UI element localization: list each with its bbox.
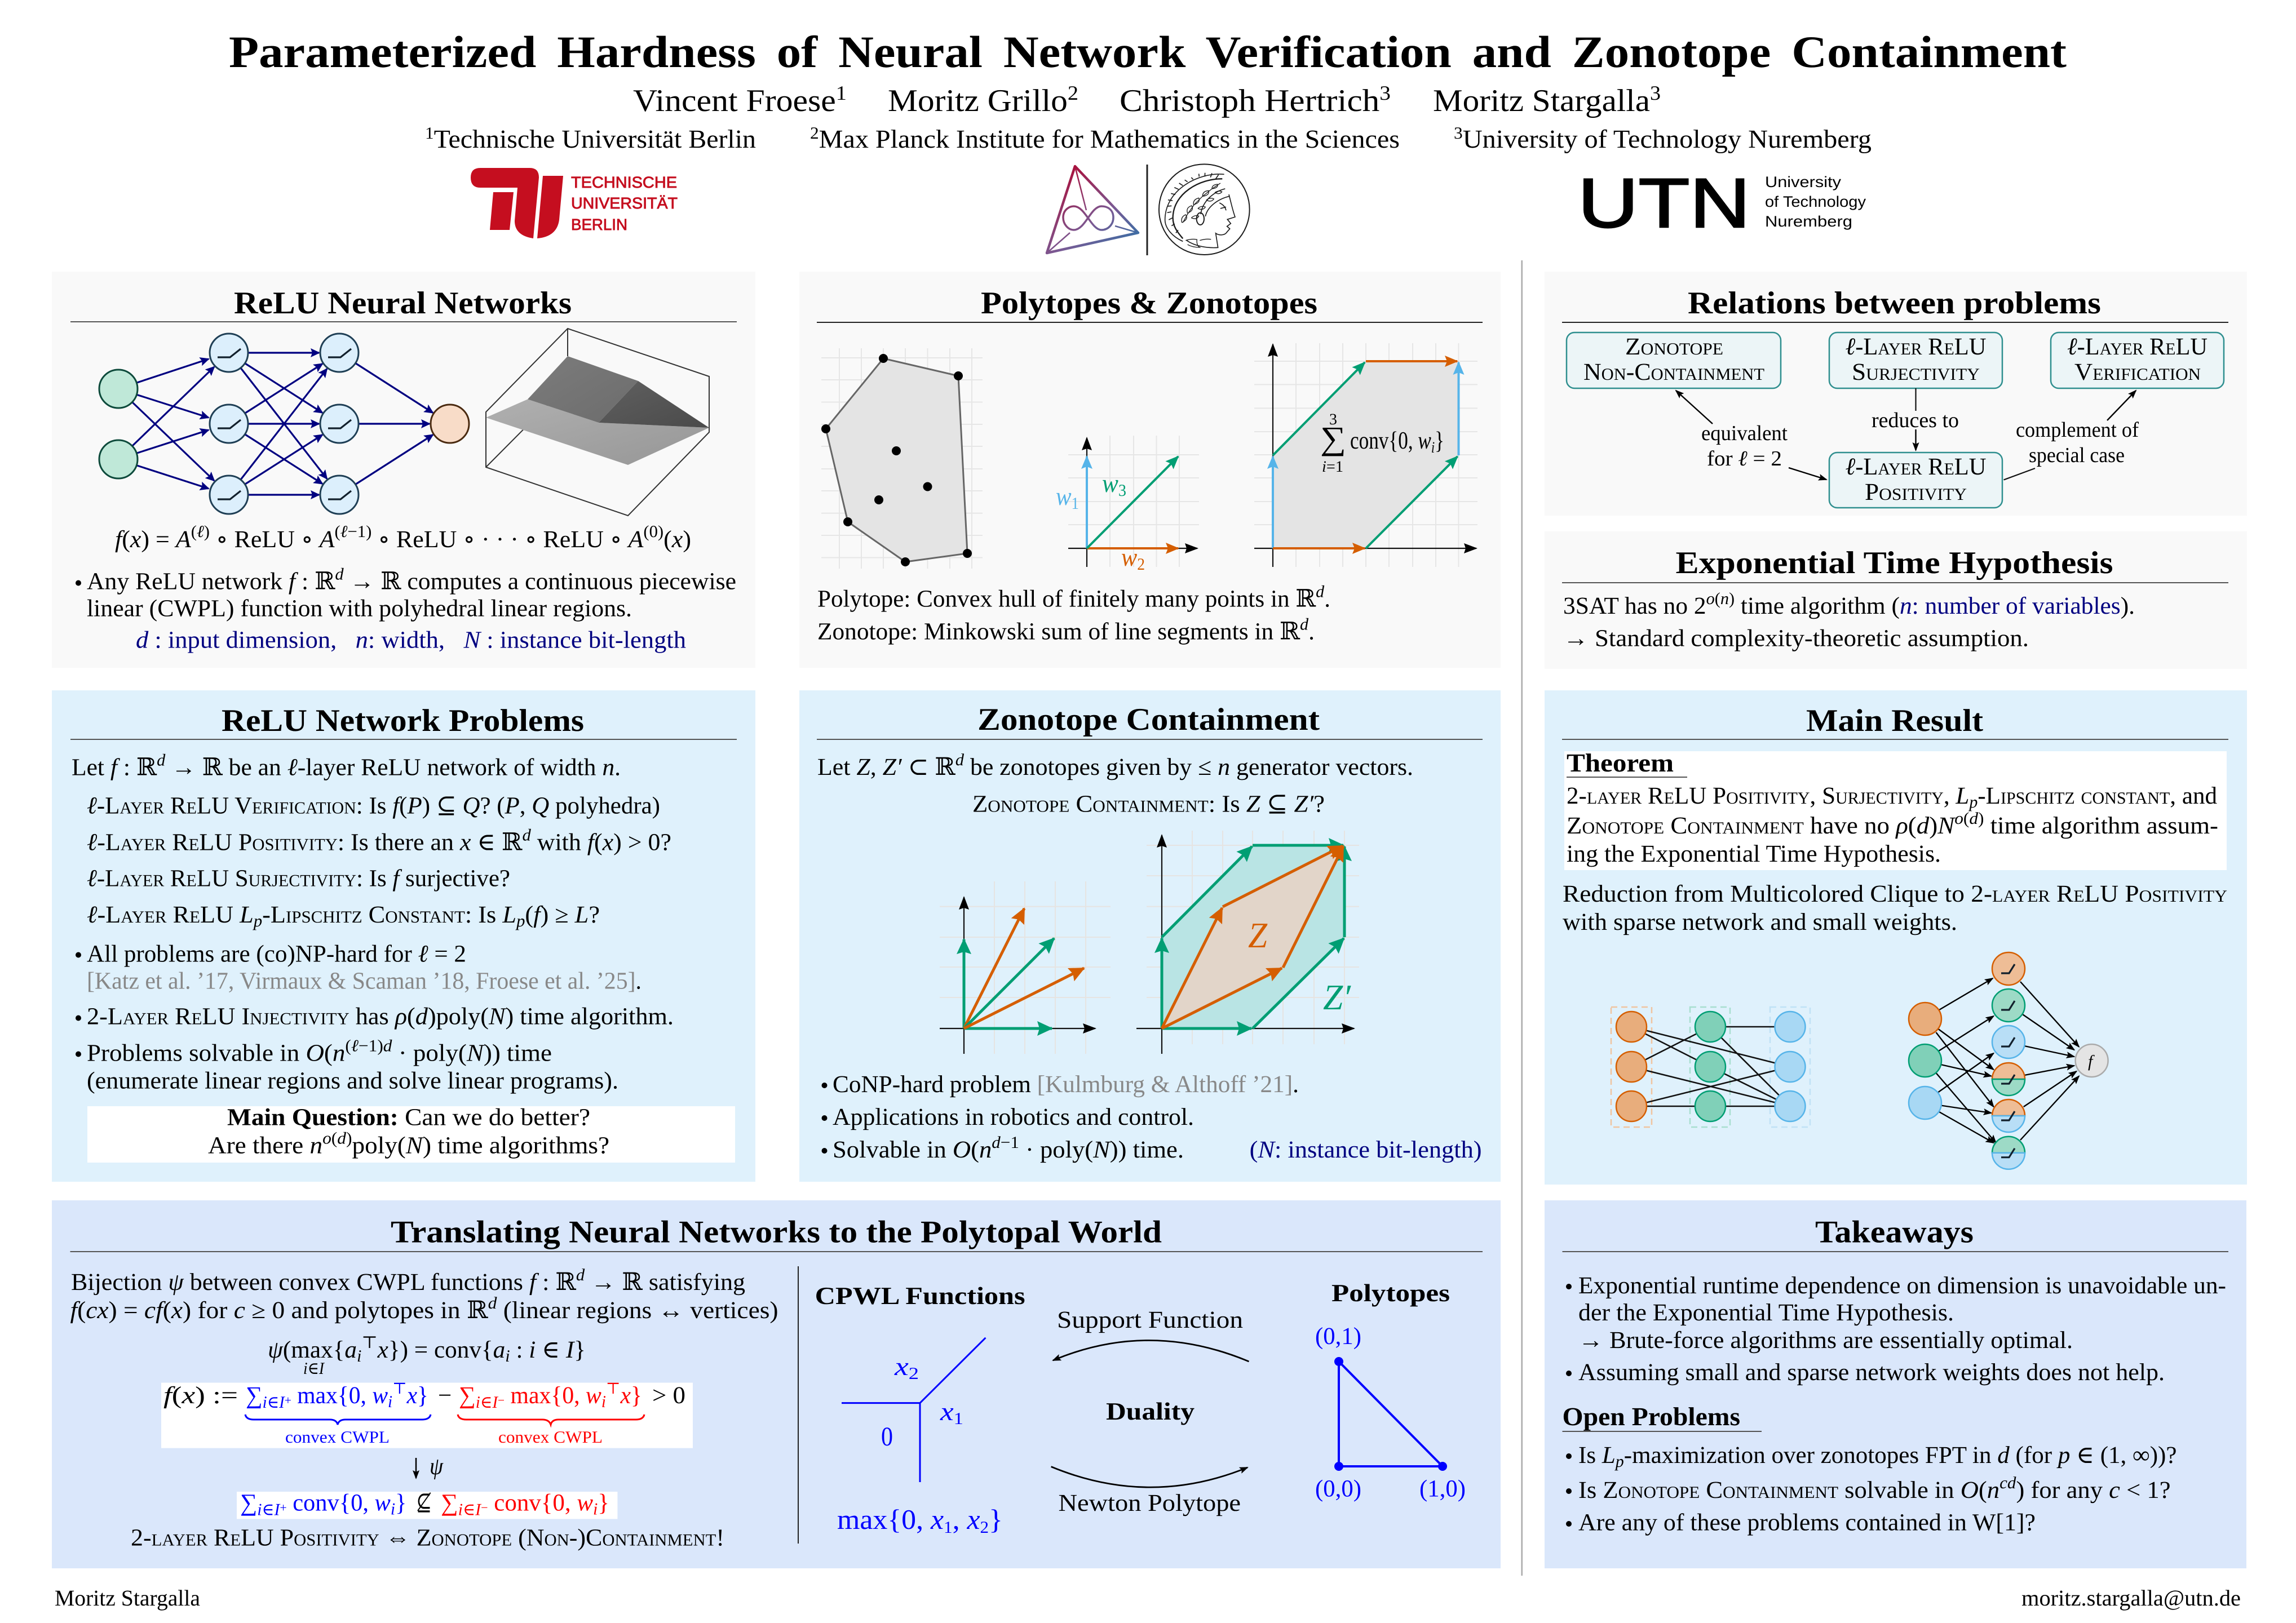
arrow: down psi (416, 1453, 444, 1480)
formula box: zonotope non-containment: I (273, 1500, 281, 1519)
arrows and labels: special case (2029, 444, 2125, 467)
definitions text: Zonotope: Minkowski sum of line segments in ℝ (817, 619, 1296, 645)
problem definitions: d (522, 826, 532, 844)
authors: Moritz Grillo (888, 83, 1057, 118)
panel: Zonotope Containment (799, 690, 1501, 1182)
problem definitions: f(x) > 0? (587, 830, 670, 855)
chart: max function graph: , (953, 1504, 967, 1535)
affiliations: University of Technology Nuremberg (1463, 125, 1872, 153)
takeaway bullets: Assuming small and sparse network weights does not help. (1578, 1359, 2165, 1386)
duality diagram: Duality (1106, 1398, 1195, 1425)
formula box: zonotope non-containment: ∑ (441, 1490, 458, 1516)
logo: UTN: of Technology (1765, 193, 1866, 210)
authors: Moritz Stargalla (1433, 83, 1638, 118)
definitions text: d (1300, 615, 1309, 633)
bullet text: d (335, 565, 344, 584)
bullet list: · poly( (392, 1040, 467, 1066)
affiliations (425, 124, 1872, 153)
formula box: f(x) difference of convex CWPL: x (406, 1382, 417, 1409)
arrow: down psi: ψ (430, 1453, 444, 1480)
callout: main question: Are there n (208, 1133, 322, 1159)
bullet list: Applications in robotics and control. (833, 1104, 1194, 1130)
authors: 2 (1068, 82, 1078, 104)
logo: UTN: Nuremberg (1765, 213, 1852, 230)
chart: Z contained in Z-prime: Z (1248, 915, 1268, 955)
affiliations: Max Planck Institute for Mathematics in the Sciences (819, 125, 1400, 153)
logo: TU Berlin: UNIVERSITÄT (571, 194, 678, 212)
formula box: f(x) difference of convex CWPL: ∑ (246, 1382, 263, 1409)
formula: x) (672, 526, 691, 553)
open problem bullets: c < 1? (2109, 1477, 2169, 1504)
formula: (ℓ) (191, 522, 210, 541)
formula box: zonotope non-containment: ∑ (240, 1490, 258, 1516)
chart: 3D surface plot (486, 329, 709, 516)
panel: Exponential Time Hypothesis (1545, 531, 2247, 669)
formula box: f(x) difference of convex CWPL: − (438, 1382, 452, 1409)
chart: constructed ReLU network: f (2088, 1052, 2095, 1071)
body text: time algorithm ( (1735, 593, 1900, 619)
formula: psi of max: i (357, 1347, 361, 1365)
chart: Z contained in Z-prime: Z′ (1323, 977, 1351, 1017)
chart: constructed ReLU network (1909, 952, 2108, 1169)
formula box: f(x) difference of convex CWPL: I (278, 1393, 286, 1412)
bullet list: d−1 (992, 1133, 1019, 1152)
callout: main question: N) time algorithms? (406, 1133, 600, 1159)
formula box: f(x) difference of convex CWPL: i (263, 1393, 267, 1412)
box: Zonotope Non-Containment (1567, 332, 1781, 388)
definitions text: d (1316, 583, 1325, 601)
chart: generator vectors: 2 (1137, 555, 1145, 574)
chart: max function graph: 1 (944, 1518, 953, 1537)
chart: max function graph: x (966, 1504, 980, 1535)
body text: (n) (1715, 589, 1735, 608)
formula box: zonotope non-containment (237, 1490, 617, 1519)
formula: psi of max: i (505, 1347, 510, 1365)
logo: UTN (1578, 165, 1866, 242)
note: (N: instance bit-length) (1250, 1137, 1482, 1163)
formula box: f(x) difference of convex CWPL: i (601, 1393, 606, 1411)
bullet text: linear (CWPL) function with polyhedral linear regions. (87, 595, 632, 622)
formula: psi of max: }) = conv{a (388, 1337, 505, 1363)
bullet list: N)) time. (1093, 1137, 1181, 1163)
problem definitions (72, 751, 671, 930)
chart: zonotope: i=1 (1322, 458, 1343, 476)
formula box: f(x) difference of convex CWPL: ⊤ (606, 1380, 620, 1398)
affiliations: Technische Universität Berlin (434, 125, 756, 153)
bullet list: Solvable in O(n (833, 1137, 991, 1163)
box: Zonotope Non-Containment: Non-Containment (1583, 359, 1764, 385)
theorem box: and (2182, 783, 2217, 809)
bijection text: (linear regions ↔ vertices) (497, 1297, 778, 1324)
chart: generator vectors: 3 (1118, 481, 1126, 500)
reduction text: Reduction from Multicolored Clique to 2-layer ReLU Positivity (1563, 881, 2227, 907)
formula box: f(x) difference of convex CWPL: w (372, 1382, 388, 1409)
formula box: f(x) difference of convex CWPL (161, 1380, 693, 1448)
chart: max function graph (837, 1338, 1003, 1537)
bijection text: → ℝ satisfying (585, 1269, 745, 1296)
chart: generator vectors (940, 881, 1111, 1054)
open problem bullets: ) for any (2016, 1477, 2109, 1504)
formula box: f(x) difference of convex CWPL: ∈ (267, 1393, 279, 1412)
box: Zonotope Non-Containment: Zonotope (1625, 334, 1723, 360)
formula box: f(x) difference of convex CWPL: ⊤ (392, 1380, 407, 1398)
open problem bullets: Is Zonotope Containment solvable in O(n (1578, 1477, 1999, 1504)
box: Positivity (1829, 453, 2002, 508)
chart: zonotope (1254, 343, 1477, 567)
chart: neural network diagram (99, 334, 469, 514)
chart: Newton polytope triangle (1315, 1323, 1466, 1502)
formula: (0) (643, 522, 663, 541)
formula box: zonotope non-containment: conv{0, (287, 1490, 375, 1516)
chart: generator vectors: w (1121, 543, 1139, 571)
chart: zonotope: ∑ (1320, 420, 1346, 456)
logo: UTN: UTN (1578, 165, 1750, 242)
problem definitions: with (531, 830, 587, 855)
formula box: f(x) difference of convex CWPL: max{0, (505, 1382, 586, 1409)
arrows and labels: complement of (2016, 418, 2139, 442)
reduction text (1563, 881, 2227, 935)
affiliations: 1 (425, 124, 434, 143)
problem definitions: Is L (478, 902, 516, 928)
formula box: zonotope non-containment: i (458, 1500, 463, 1519)
formula box: zonotope non-containment: } (598, 1490, 609, 1516)
logo: Max Planck Institute triangle (1047, 166, 1138, 253)
chart: max function graph: max{0, x (837, 1504, 943, 1535)
box: Positivity: Positivity (1865, 479, 1967, 505)
problem definitions: ℓ-Layer ReLU Verification: Is f(P) ⊆ Q? (P, Q polyhedra) (87, 792, 660, 819)
problem definitions: → ℝ be an (165, 754, 287, 781)
duality diagram: Support Function (1057, 1307, 1243, 1333)
open problem bullets: d (for p ∈ (1, ∞))? (1997, 1442, 2176, 1469)
theorem box: ing the Exponential Time Hypothesis. (1567, 841, 1941, 867)
conclusion text: 2-layer ReLU Positivity ⇔ Zonotope (Non-)Containment! (131, 1525, 724, 1551)
panel: Main Result (1545, 690, 2247, 1185)
authors: 3 (1650, 82, 1661, 104)
box: Verification: Verification (2074, 359, 2201, 385)
panel: Translating Neural Networks to the Polytopal World (52, 1200, 1501, 1568)
callout: main question: poly( (352, 1133, 406, 1159)
formula box: zonotope non-containment: i (257, 1500, 262, 1519)
chart: generator vectors: w (1056, 482, 1073, 511)
formula: psi of max: ψ(max{a (268, 1337, 357, 1363)
formula box: zonotope non-containment: } (395, 1490, 407, 1516)
formula box: f(x) difference of convex CWPL: convex CWPL (285, 1428, 390, 1447)
body text: → Standard complexity-theoretic assumption. (1563, 626, 2029, 651)
panel: ReLU Network Problems (52, 690, 755, 1182)
bullet list: N)) time (467, 1040, 549, 1066)
formula box: f(x) difference of convex CWPL: f(x) := (163, 1382, 238, 1409)
reduction text: with sparse network and small weights. (1563, 909, 1957, 935)
heading: Polytopes & Zonotopes (981, 286, 1317, 321)
open problem bullets: p (1614, 1452, 1624, 1471)
problem definitions: Let f : ℝ (72, 754, 156, 781)
callout: main question (87, 1105, 735, 1163)
logo: TU Berlin: TECHNISCHE (571, 174, 677, 191)
chart: max function graph: } (989, 1504, 1003, 1535)
formula box: f(x) difference of convex CWPL: ∑ (459, 1382, 476, 1409)
bullet text: Any ReLU network f : ℝ (87, 568, 334, 595)
affiliations: 3 (1454, 124, 1463, 143)
box: Verification: ℓ-Layer ReLU (2067, 334, 2207, 360)
problem definitions: d (157, 751, 166, 770)
heading: Translating Neural Networks to the Polytopal World (391, 1215, 1162, 1250)
callout: main question: o(d) (322, 1129, 352, 1147)
chart: max function graph: 1 (954, 1409, 963, 1428)
definitions text: . (1324, 586, 1330, 612)
formula box: f(x) difference of convex CWPL: I (492, 1393, 499, 1412)
formula box: zonotope non-containment: i (593, 1500, 598, 1518)
formula box: f(x) difference of convex CWPL: > 0 (652, 1382, 685, 1409)
chart: generator vectors (1056, 436, 1199, 574)
formula box: f(x) difference of convex CWPL: i (388, 1393, 392, 1411)
bullet text: → ℝ computes a continuous piecewise (344, 568, 736, 595)
footer: presenter: Moritz Stargalla (55, 1585, 200, 1611)
chart: generator vectors: 1 (1072, 494, 1079, 513)
arrows and labels: reduces to (1872, 409, 1959, 432)
heading: Main Result (1806, 703, 1983, 738)
chart: Newton polytope triangle: (0,1) (1315, 1323, 1361, 1350)
theorem box: 2-layer ReLU Positivity, Surjectivity, L (1567, 783, 1969, 809)
formula box: f(x) difference of convex CWPL: − (498, 1393, 505, 1407)
box: Positivity: ℓ-Layer ReLU (1846, 454, 1987, 480)
logo: Minerva (1159, 164, 1250, 255)
box: Surjectivity: ℓ-Layer ReLU (1846, 334, 1987, 360)
definition text: n generator vectors. (1218, 754, 1410, 781)
logo separator (1147, 165, 1148, 255)
formula box: zonotope non-containment: I (475, 1500, 482, 1519)
formula box: f(x) difference of convex CWPL: max{0, (291, 1382, 372, 1409)
takeaway bullets (1566, 1272, 2226, 1386)
duality diagram: Polytopes (1331, 1279, 1450, 1307)
arrows and labels (1676, 388, 2139, 480)
panel: Relations between problems (1545, 272, 2247, 516)
open problem bullets: Are any of these problems contained in W[1]? (1578, 1510, 2036, 1536)
chart: zonotope: } (1435, 427, 1444, 454)
problem definitions: ℓ-Layer ReLU Positivity: Is there an x ∈ ℝ (87, 830, 521, 855)
formula: ∘ ReLU ∘ · · · ∘ ReLU ∘ (371, 526, 628, 553)
arrows and labels: for ℓ = 2 (1707, 447, 1782, 471)
heading: ReLU Neural Networks (234, 286, 572, 321)
formula box: zonotope non-containment: conv{0, (488, 1490, 577, 1516)
open problem bullets (1566, 1442, 2177, 1536)
box: Surjectivity: Surjectivity (1852, 359, 1980, 385)
arrows and labels: equivalent (1701, 422, 1788, 445)
theorem box (1564, 748, 2227, 870)
bijection text: d (576, 1266, 585, 1284)
theorem box: -Lipschitz constant, (1978, 783, 2176, 809)
subheading: open problems: Open Problems (1563, 1402, 1740, 1431)
formula box: f(x) difference of convex CWPL: x (620, 1382, 631, 1409)
authors: 1 (836, 82, 847, 104)
formula box: f(x) difference of convex CWPL: + (285, 1393, 291, 1407)
formula: psi of max: x (377, 1337, 388, 1363)
open problem bullets: cd (1999, 1474, 2017, 1492)
box: Surjectivity (1829, 332, 2002, 388)
problem definitions: ( (525, 902, 533, 928)
formula box: f(x) difference of convex CWPL: ∈ (480, 1393, 492, 1412)
theorem box: Zonotope Containment have no ρ(d)N (1567, 813, 1954, 839)
affiliations: 2 (810, 124, 819, 143)
column divider (1521, 260, 1523, 1576)
body text: o (1706, 589, 1715, 608)
formula: psi of max: i∈I (303, 1359, 325, 1378)
formula box: zonotope non-containment: + (280, 1500, 287, 1515)
chart: multicolored clique graph (1611, 1007, 1810, 1127)
theorem box: p (1968, 793, 1978, 812)
box: Verification (2051, 332, 2224, 388)
problem definitions: ℓ-Layer ReLU L (87, 902, 253, 928)
formula box: zonotope non-containment: ∈ (463, 1500, 475, 1519)
formula: f(x) = A (115, 526, 191, 553)
chart: max function graph: x (895, 1352, 906, 1381)
bijection text (70, 1266, 778, 1324)
formula box: zonotope non-containment: ⊈ (416, 1490, 432, 1516)
formula: (ℓ−1) (334, 522, 371, 541)
problem definitions: p (253, 912, 262, 930)
authors: Vincent Froese (633, 83, 823, 118)
bullet list: (ℓ−1)d (345, 1037, 392, 1055)
definition text: Let Z, Z′ ⊂ ℝ (817, 754, 954, 781)
bullet list: [Katz et al. ’17, Virmaux & Scaman ’18, Froese et al. ’25]. (87, 968, 642, 994)
bullet list (822, 1071, 1299, 1163)
bullet text (76, 565, 736, 622)
bullet list: (enumerate linear regions and solve linear programs). (87, 1067, 618, 1094)
problem definitions: p (515, 912, 525, 930)
definition text: be zonotopes given by ≤ (964, 754, 1218, 781)
authors: Christoph Hertrich (1120, 83, 1357, 118)
formula box: zonotope non-containment: ∈ (262, 1500, 274, 1519)
duality diagram: CPWL Functions (815, 1282, 1025, 1310)
formula box: zonotope non-containment: i (391, 1500, 395, 1518)
bijection text: f(cx) = cf(x) for c ≥ 0 and polytopes in ℝ (70, 1297, 475, 1324)
heading: Takeaways (1815, 1215, 1974, 1250)
heading: ReLU Network Problems (222, 703, 584, 738)
formula: psi of max (268, 1333, 586, 1378)
chart: zonotope: i (1431, 439, 1435, 456)
formula: psi of max: i ∈ I} (529, 1337, 586, 1363)
formula box: f(x) difference of convex CWPL: i (476, 1393, 480, 1412)
panel: Takeaways (1545, 1200, 2246, 1568)
problem definitions: ℓ-Layer ReLU Surjectivity: Is f surjective? (87, 866, 510, 892)
takeaway bullets: Exponential runtime dependence on dimension is unavoidable un- (1578, 1272, 2226, 1299)
definition text: d (955, 751, 965, 769)
footer: email: moritz.stargalla@utn.de (2021, 1585, 2241, 1611)
duality diagram: Newton Polytope (1059, 1490, 1241, 1516)
formula box: f(x) difference of convex CWPL: } (631, 1382, 643, 1409)
formula: psi of max: ⊤ (361, 1333, 378, 1352)
definitions text (817, 583, 1330, 645)
chart: zonotope: conv{0, w (1350, 427, 1435, 454)
formula: ( (663, 526, 672, 553)
formula box: f(x) difference of convex CWPL: } (417, 1382, 429, 1409)
formula box: zonotope non-containment: w (577, 1490, 593, 1516)
chart: Z contained in Z-prime (1136, 831, 1359, 1054)
formula box: zonotope non-containment: w (375, 1490, 391, 1516)
bullet list: All problems are (co)NP-hard for ℓ = 2 (87, 941, 466, 967)
panel: ReLU Neural Networks (52, 272, 755, 668)
problem statement: Zonotope Containment: Is Z ⊆ Z′? (972, 791, 1325, 817)
problem definitions: f) ≥ L? (533, 902, 599, 928)
formula: ∘ ReLU ∘ (210, 526, 320, 553)
theorem box: time algorithm assum- (1984, 813, 2218, 839)
heading: Zonotope Containment (977, 702, 1320, 737)
problem definitions: -Lipschitz Constant: (262, 902, 472, 928)
open problem bullets: Is L (1578, 1442, 1616, 1469)
heading: Exponential Time Hypothesis (1675, 546, 2113, 580)
takeaway bullets: → Brute-force algorithms are essentially optimal. (1578, 1327, 2073, 1354)
chart: max function graph: 2 (980, 1518, 989, 1537)
open problem bullets: -maximization over zonotopes FPT in (1624, 1442, 1997, 1469)
problem definitions: ℓ-layer ReLU network of width n. (287, 754, 621, 781)
authors: 3 (1379, 82, 1391, 104)
chart: Newton polytope triangle: (1,0) (1419, 1475, 1466, 1502)
chart: max function graph: 0 (881, 1422, 893, 1452)
chart: max function graph: 2 (909, 1364, 919, 1383)
legend text: d : input dimension, n: width, N : instance bit-length (136, 627, 686, 654)
bullet list: CoNP-hard problem [Kulmburg & Althoff ’21]. (833, 1071, 1299, 1098)
definitions text: Polytope: Convex hull of finitely many points in ℝ (817, 586, 1314, 612)
callout: main question: Main Question: Can we do better? (227, 1105, 590, 1130)
duality diagram (815, 1279, 1466, 1537)
panel: Polytopes and Zonotopes (799, 272, 1501, 668)
bullet list (76, 941, 674, 1094)
logo: UTN: University (1765, 174, 1842, 190)
theorem box: Theorem (1567, 748, 1674, 777)
formula box: f(x) difference of convex CWPL: w (586, 1382, 601, 1409)
formula: psi of max: : (510, 1337, 529, 1363)
chart: generator vectors: w (1102, 469, 1120, 498)
bullet list: 2-Layer ReLU Injectivity has ρ(d)poly(N) time algorithm. (87, 1003, 674, 1030)
logo: TU Berlin (471, 168, 678, 238)
body text: 3SAT has no 2 (1563, 593, 1705, 619)
formula box: f(x) difference of convex CWPL: convex CWPL (498, 1428, 603, 1447)
chart: zonotope: 3 (1329, 411, 1337, 428)
title: Parameterized Hardness of Neural Network Verification and Zonotope Containment (229, 28, 2067, 77)
takeaway bullets: der the Exponential Time Hypothesis. (1578, 1300, 1954, 1326)
bullet list: · poly( (1019, 1137, 1093, 1163)
bijection text: d (488, 1294, 498, 1312)
chart: max function graph: x (940, 1397, 952, 1426)
bullet list: Problems solvable in O(n (87, 1040, 344, 1066)
bijection text: Bijection ψ between convex CWPL functions f : ℝ (71, 1269, 575, 1296)
chart: Newton polytope triangle: (0,0) (1315, 1475, 1361, 1502)
theorem box: o(d) (1954, 809, 1984, 828)
formula box: zonotope non-containment: − (481, 1500, 488, 1515)
body text: n: number of variables). (1900, 593, 2135, 619)
heading: Relations between problems (1688, 286, 2101, 321)
formula: A (318, 526, 335, 553)
definitions text: . (1308, 619, 1315, 645)
logo: TU Berlin: BERLIN (571, 216, 627, 233)
chart: polytope with points (821, 348, 983, 569)
authors (633, 82, 1661, 118)
formula: A (626, 526, 644, 553)
